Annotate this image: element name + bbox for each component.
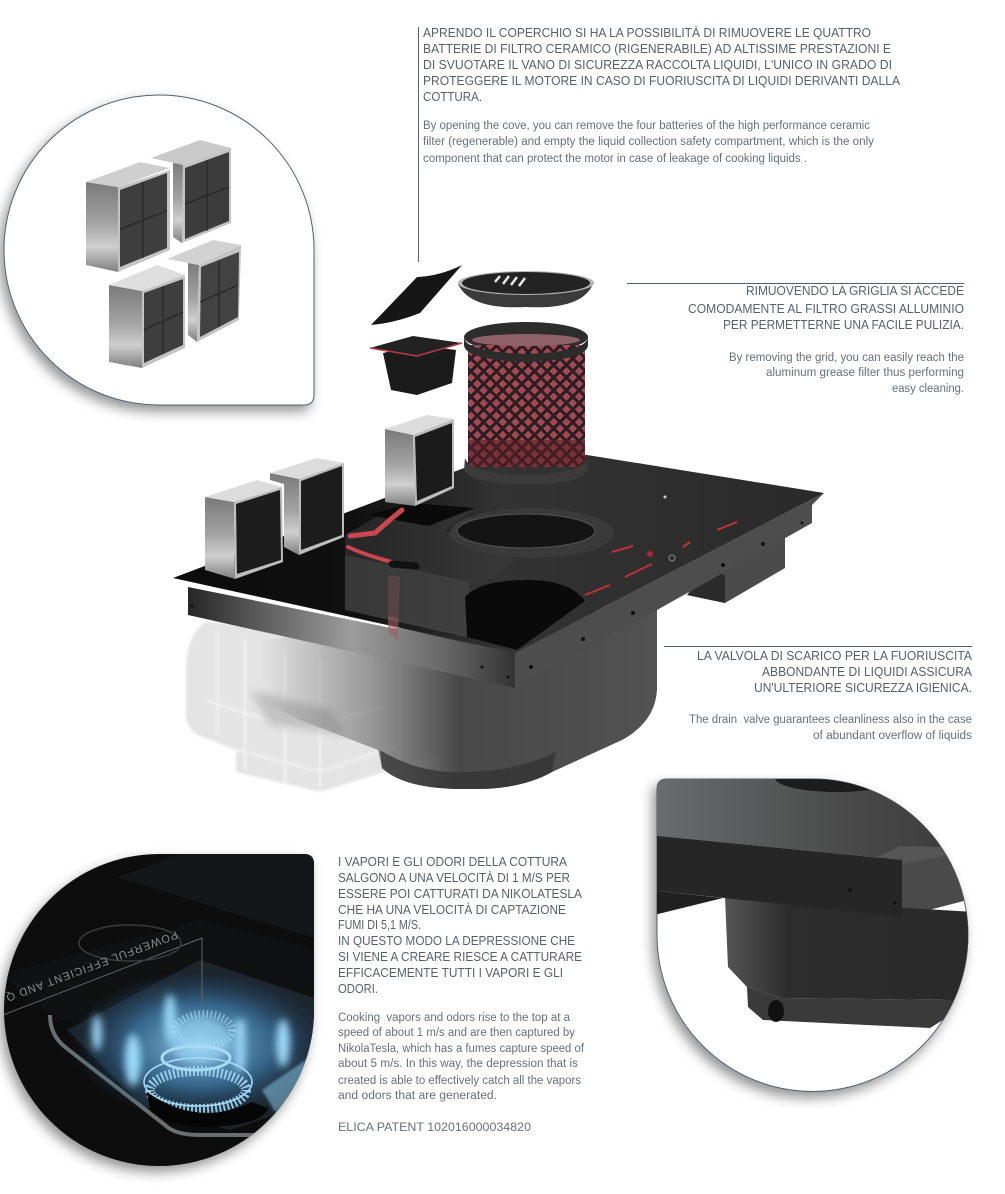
grid text block: By removing the grid, you can easily reach the xyxy=(729,352,964,364)
drain valve text block: LA VALVOLA DI SCARICO PER LA FUORIUSCITA xyxy=(697,649,973,663)
burner rings xyxy=(144,1014,252,1109)
top text block xyxy=(418,25,901,262)
removable grid xyxy=(458,271,594,307)
airflow text block: ODORI. xyxy=(338,982,378,996)
upper duct opening xyxy=(450,508,614,558)
hob upper surface xyxy=(117,854,320,940)
tub body xyxy=(260,606,657,789)
leader line xyxy=(627,282,964,284)
grid text block: COMODAMENTE AL FILTRO GRASSI ALLUMINIO xyxy=(688,302,964,316)
leader line xyxy=(664,646,972,648)
airflow text block: about 5 m/s. In this way, the depression that is xyxy=(338,1058,578,1070)
lower tub ring xyxy=(380,750,556,789)
tub interior xyxy=(67,960,320,1130)
tub ring xyxy=(747,987,975,1028)
top text block: COTTURA. xyxy=(423,90,482,104)
dark base under burner xyxy=(147,1092,268,1127)
top text block: filter (regenerable) and empty the liquid collection safety compartment, which is the only xyxy=(423,136,874,148)
drain valve text block: of abundant overflow of liquids xyxy=(813,730,972,742)
hob front side face xyxy=(188,587,515,688)
touch controls xyxy=(585,496,737,595)
icon: filter front left xyxy=(109,265,185,368)
recess tray xyxy=(368,503,475,526)
airflow text block: FUMI DI 5,1 M/S. xyxy=(338,918,421,932)
panel: ceramic filter batteries xyxy=(4,95,314,405)
top text block: PROTEGGERE IL MOTORE IN CASO DI FUORIUSCITA DI LIQUIDI DERIVANTI DALLA xyxy=(423,74,901,88)
top text block: DI SVUOTARE IL VANO DI SICUREZZA RACCOLTA LIQUIDI, L'UNICO IN GRADO DI xyxy=(423,58,892,72)
hob glass surface xyxy=(173,445,824,653)
airflow text block: I VAPORI E GLI ODORI DELLA COTTURA xyxy=(338,855,568,869)
red strap xyxy=(348,510,416,566)
panel: airflow rendering xyxy=(0,854,330,1166)
light guide lines xyxy=(3,938,202,1015)
right blue streak xyxy=(261,1058,306,1113)
glass reflections xyxy=(345,555,470,637)
drain valve xyxy=(768,1000,784,1022)
drain valve text block xyxy=(664,646,973,742)
top text block: By opening the cove, you can remove the four batteries of the high performance ceramic xyxy=(423,120,870,132)
filter on hob middle xyxy=(270,458,344,555)
lower duct opening xyxy=(465,580,585,650)
icon: filter back left xyxy=(86,162,170,272)
airflow text block: IN QUESTO MODO LA DEPRESSIONE CHE xyxy=(338,934,575,948)
airflow text block: ELICA PATENT 102016000034820 xyxy=(338,1122,531,1134)
filter on hob left xyxy=(205,480,283,579)
hob surface band xyxy=(6,973,314,1040)
airflow text block xyxy=(338,855,585,1134)
airflow text block: SI VIENE A CREARE RIESCE A CATTURARE xyxy=(338,950,582,964)
airflow text block: Cooking vapors and odors rise to the top at a xyxy=(338,1012,571,1024)
hob top surface xyxy=(657,779,944,858)
hob right side face xyxy=(515,493,824,688)
airflow text block: and odors that are generated. xyxy=(338,1090,497,1102)
top text block: component that can protect the motor in case of leakage of cooking liquids . xyxy=(423,153,807,165)
rear duct box xyxy=(687,520,785,603)
blue glow xyxy=(78,976,314,1112)
top text block: BATTERIE DI FILTRO CERAMICO (RIGENERABILE) AD ALTISSIME PRESTAZIONI E xyxy=(423,42,891,56)
drain valve text block: UN'ULTERIORE SICUREZZA IGIENICA. xyxy=(754,681,972,695)
leader line xyxy=(418,27,420,262)
engraved hob lettering: POWERFUL EFFICIENT AND Q xyxy=(4,928,179,1003)
rear underside xyxy=(657,890,723,914)
airflow text block: speed of about 1 m/s and are then captured by xyxy=(338,1027,575,1039)
soft ghost tank xyxy=(186,622,470,792)
face screws xyxy=(848,888,897,905)
icon: filter front right xyxy=(167,240,241,342)
airflow text block: ESSERE POI CATTURATI DA NIKOLATESLA xyxy=(338,887,583,901)
drain valve text block: The drain valve guarantees cleanliness also in the case xyxy=(689,714,972,726)
grid text block: aluminum grease filter thus performing xyxy=(766,367,964,379)
grid text block: RIMUOVENDO LA GRIGLIA SI ACCEDE xyxy=(746,284,964,298)
airflow text block: CHE HA UNA VELOCITÀ DI CAPTAZIONE xyxy=(338,902,566,917)
filter lifted xyxy=(385,415,454,506)
hob front face xyxy=(657,836,902,908)
hob corner rim xyxy=(878,846,946,864)
grid text block xyxy=(627,284,964,395)
grid text block: PER PERMETTERNE UNA FACILE PULIZIA. xyxy=(723,318,964,332)
icon: filter back right xyxy=(151,140,231,243)
grid text block: easy cleaning. xyxy=(892,383,964,395)
airflow text block: SALGONO A UNA VELOCITÀ DI 1 M/S PER xyxy=(338,870,570,885)
airflow text block: NikolaTesla, which has a fumes capture speed of xyxy=(338,1043,585,1055)
tub body xyxy=(725,897,975,1000)
hob right face xyxy=(902,856,964,910)
drain valve text block: ABBONDANTE DI LIQUIDI ASSICURA xyxy=(762,665,973,679)
screws xyxy=(190,522,804,678)
tub outline xyxy=(48,1015,254,1137)
airflow text block: created is able to effectively catch all the vapors xyxy=(338,1075,581,1087)
panel: drain valve detail xyxy=(650,764,975,1092)
exploded product illustration xyxy=(173,265,824,792)
cover lid xyxy=(371,265,462,325)
airflow text block: EFFICACEMENTE TUTTI I VAPORI E GLI xyxy=(338,966,563,980)
grease filter basket xyxy=(464,322,588,484)
liquid collection tray xyxy=(370,336,462,395)
top text block: APRENDO IL COPERCHIO SI HA LA POSSIBILITÀ DI RIMUOVERE LE QUATTRO xyxy=(423,25,871,40)
